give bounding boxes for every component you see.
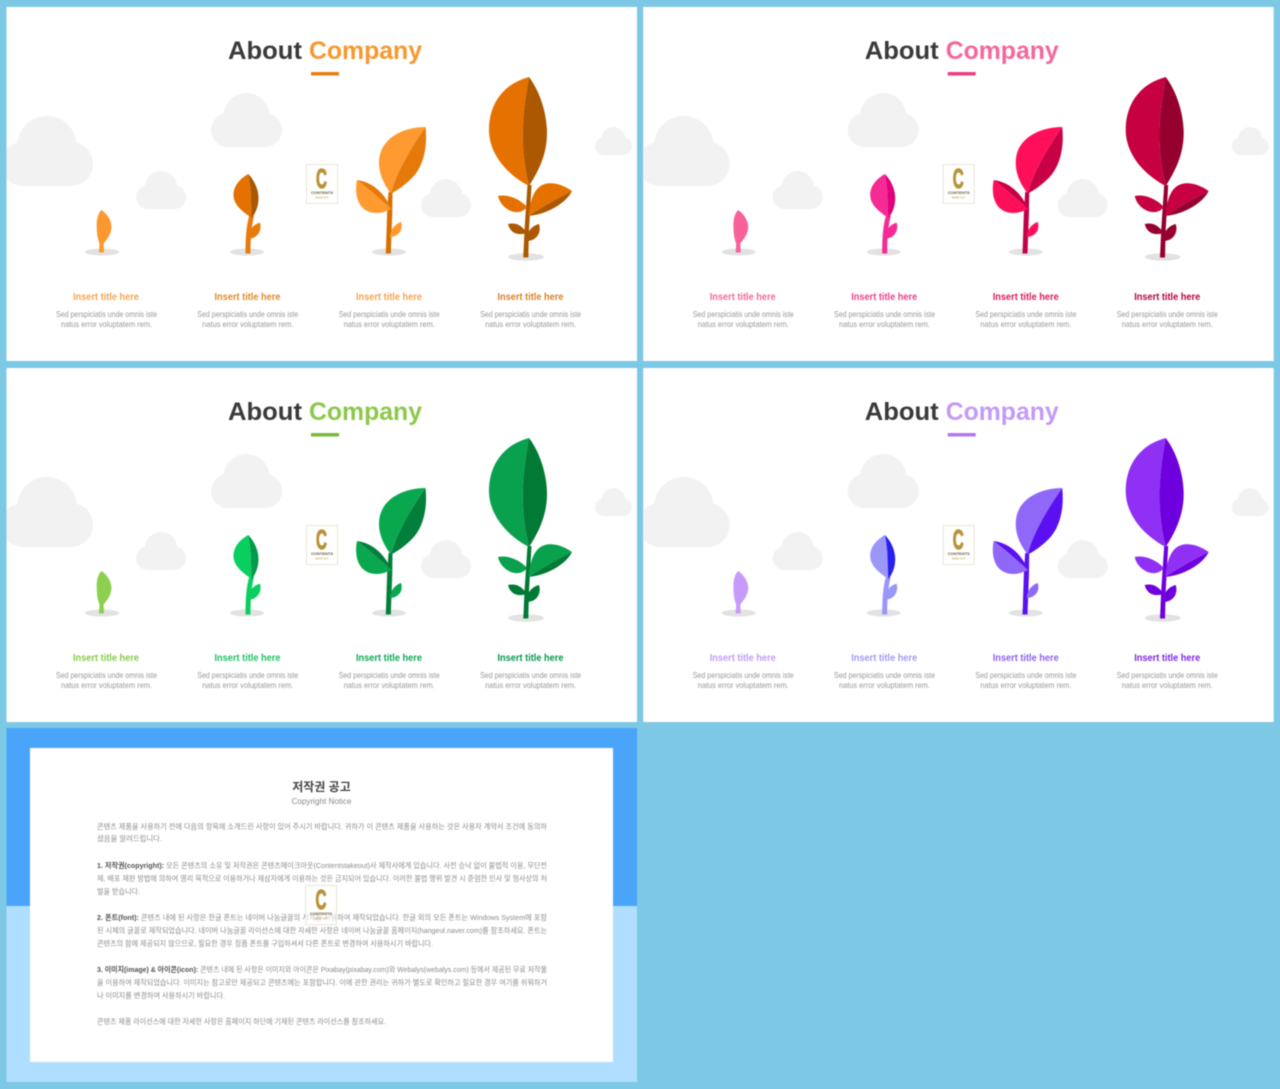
heading: About	[865, 37, 939, 65]
section 3 image and icon: 을 이용하여 제작되었습니다. 이미지는 참고로만 제공되고 콘텐츠에는 포함합니다. 이에 관한 권리는 귀하가 별도로 확인하고 필요한 경우 여기를 쉬워하거	[97, 977, 547, 987]
panel: purple About Company	[638, 368, 1274, 722]
caption 2	[834, 653, 935, 690]
plant stage 4	[1126, 77, 1209, 261]
logo watermark: C	[316, 524, 327, 555]
caption 3: Insert title here	[993, 653, 1059, 664]
caption 1: natus error voluptatem rem.	[698, 319, 789, 329]
heading	[228, 37, 422, 65]
logo watermark: CONTENTS	[310, 911, 332, 916]
section 1 copyright	[97, 860, 547, 896]
section 2 font: 콘텐츠의 함에 제공되지 않으므로, 필요한 경우 정품 폰트를 구입하셔서 다른 폰트로 변경하여 사용하시기 바랍니다.	[97, 938, 433, 948]
caption 2: Sed perspiciatis unde omnis iste	[197, 309, 299, 319]
caption 3	[975, 292, 1077, 329]
caption 4: Insert title here	[498, 653, 564, 664]
section 3 image and icon: 나 이미지를 변경하여 사용하시기 바랍니다.	[97, 990, 225, 1000]
heading	[865, 398, 1059, 426]
logo watermark: MAKE OUT	[315, 196, 329, 200]
caption 1: Sed perspiciatis unde omnis iste	[56, 670, 157, 680]
plant stage 3	[993, 488, 1063, 616]
heading: About	[228, 398, 303, 426]
caption 1: Insert title here	[710, 292, 776, 303]
caption 3: Sed perspiciatis unde omnis iste	[975, 670, 1077, 680]
caption 2: natus error voluptatem rem.	[202, 680, 293, 690]
caption 2: natus error voluptatem rem.	[839, 319, 930, 329]
caption 3: natus error voluptatem rem.	[980, 319, 1071, 329]
section 2 font: 2. 폰트(font): 콘텐츠 내에 된 사항은 한글 폰트는 네이버 나눔글꼴의 서체를 사용하여 제작되었습니다. 한글 외의 모든 폰트는 Windows System에 포함	[97, 912, 547, 922]
panel: green About Company	[1, 368, 637, 722]
caption 3: natus error voluptatem rem.	[980, 680, 1071, 690]
caption 3: Insert title here	[993, 292, 1059, 303]
caption 3: Sed perspiciatis unde omnis iste	[339, 670, 440, 680]
heading underline	[311, 72, 339, 76]
logo watermark	[306, 524, 338, 564]
section 1 copyright: 재, 배포 재판 방법에 의하여 영리 목적으로 이용하거나 제삼자에게 이용하는 것은 금지되어 있습니다. 이러한 불법 행위 발견 시 준엄한 민사 및 형사상의 처	[97, 873, 547, 883]
logo watermark: MAKE OUT	[952, 556, 966, 560]
heading: About	[865, 398, 939, 426]
caption 3: Sed perspiciatis unde omnis iste	[339, 309, 440, 319]
caption 2: Sed perspiciatis unde omnis iste	[834, 309, 935, 319]
intro paragraph: 셨음을 알려드립니다.	[97, 833, 162, 843]
heading underline	[948, 433, 976, 436]
caption 3: Insert title here	[356, 292, 422, 303]
intro paragraph	[97, 821, 547, 843]
closing line: 콘텐츠 제품 라이선스에 대한 자세한 사항은 홈페이지 하단에 기재된 콘텐츠 라이선스를 참조하세요.	[97, 1016, 386, 1026]
heading: Company	[946, 398, 1059, 426]
caption 2: Sed perspiciatis unde omnis iste	[834, 670, 935, 680]
caption 3: Sed perspiciatis unde omnis iste	[975, 309, 1077, 319]
logo watermark: C	[316, 884, 326, 915]
caption 2: Insert title here	[851, 653, 918, 664]
plant stage 4	[1126, 438, 1209, 622]
caption 4: Insert title here	[498, 292, 564, 303]
plant stage 4	[489, 77, 572, 261]
caption 1	[56, 653, 157, 690]
section 2 font: 된 시체의 글꼴로 제작되었습니다. 네이버 나눔글꼴 라이선스에 대한 자세한 사항은 네이버 나눔글꼴 홈페이지(hangeul.naver.com)를 참조하세요. 폰트는	[97, 925, 547, 935]
heading underline	[311, 433, 339, 436]
plant stage 2	[867, 535, 901, 616]
caption 3	[339, 653, 440, 690]
section 3 image and icon	[97, 964, 547, 1000]
caption 4: natus error voluptatem rem.	[485, 680, 576, 690]
caption 1: natus error voluptatem rem.	[61, 319, 152, 329]
panel: pink About Company	[638, 7, 1274, 361]
caption 1: natus error voluptatem rem.	[698, 680, 789, 690]
section 2 font	[97, 912, 547, 948]
caption 3	[975, 653, 1077, 690]
caption 1: Sed perspiciatis unde omnis iste	[693, 309, 794, 319]
logo watermark: C	[316, 163, 327, 194]
panel: copyright notice	[6, 728, 637, 1082]
plant stage 2	[867, 174, 901, 256]
heading	[865, 37, 1059, 65]
logo watermark: MAKE OUT	[314, 916, 328, 920]
notice title	[292, 779, 352, 806]
logo watermark	[943, 524, 974, 564]
caption 3	[339, 292, 440, 329]
caption 1: Sed perspiciatis unde omnis iste	[56, 309, 157, 319]
caption 4: natus error voluptatem rem.	[1122, 680, 1213, 690]
caption 4	[480, 292, 581, 329]
logo watermark: MAKE OUT	[952, 196, 966, 200]
caption 2	[834, 292, 935, 329]
heading: About	[228, 37, 303, 65]
section 3 image and icon: 3. 이미지(image) & 아이콘(icon): 콘텐츠 내에 된 사항은 이미지와 아이콘은 Pixabay(pixabay.com)와 Webalys(webalys.com) 등에서 제공된 무료 저작물	[97, 964, 547, 974]
plant stage 2	[230, 174, 264, 256]
caption 2: natus error voluptatem rem.	[202, 319, 293, 329]
caption 1: natus error voluptatem rem.	[61, 680, 152, 690]
heading: Company	[946, 37, 1059, 65]
caption 4	[1117, 292, 1218, 329]
heading underline	[948, 72, 976, 76]
logo watermark: CONTENTS	[311, 190, 333, 195]
logo watermark: CONTENTS	[311, 551, 333, 556]
intro paragraph: 콘텐츠 제품을 사용하기 전에 다음의 항목에 소개드린 사항이 있어 주시기 바랍니다. 귀하가 이 콘텐츠 제품을 사용하는 것은 사용자 계약서 조건에 동의하	[97, 821, 547, 831]
plant stage 3	[356, 488, 426, 616]
caption 4: Sed perspiciatis unde omnis iste	[1117, 309, 1218, 319]
plant stage 1	[85, 210, 119, 256]
heading	[228, 398, 422, 426]
caption 4: Insert title here	[1134, 653, 1201, 664]
section 1 copyright: 1. 저작권(copyright): 모든 콘텐츠의 소유 및 저작권은 콘텐츠메이크아웃(Contentstakeout)사 제작사에게 있습니다. 사전 승낙 없이 불법적 이용, 무단전	[97, 860, 547, 870]
logo watermark: MAKE OUT	[315, 556, 329, 560]
caption 4: Sed perspiciatis unde omnis iste	[480, 309, 581, 319]
plant stage 3	[993, 127, 1063, 256]
caption 3: Insert title here	[356, 653, 422, 664]
logo watermark	[943, 163, 974, 204]
caption 2	[197, 653, 299, 690]
caption 1: Insert title here	[73, 653, 139, 664]
caption 1	[693, 653, 794, 690]
logo watermark	[306, 163, 338, 204]
caption 4: natus error voluptatem rem.	[1122, 319, 1213, 329]
plant stage 1	[85, 571, 119, 616]
heading: Company	[309, 37, 422, 65]
caption 4: Insert title here	[1134, 292, 1201, 303]
caption 4	[1117, 653, 1218, 690]
notice title: 저작권 공고	[292, 779, 351, 794]
plant stage 2	[230, 535, 264, 616]
caption 2: Insert title here	[214, 292, 281, 303]
caption 4: natus error voluptatem rem.	[485, 319, 576, 329]
logo watermark: CONTENTS	[948, 190, 970, 195]
panel: orange About Company	[1, 7, 637, 361]
notice title: Copyright Notice	[292, 796, 352, 806]
caption 3: natus error voluptatem rem.	[344, 680, 435, 690]
plant stage 4	[489, 438, 572, 622]
plant stage 1	[722, 210, 756, 256]
plant stage 1	[722, 571, 756, 616]
caption 2: Insert title here	[214, 653, 281, 664]
logo watermark: C	[953, 163, 964, 194]
caption 1	[693, 292, 794, 329]
caption 2: Sed perspiciatis unde omnis iste	[197, 670, 299, 680]
caption 4: Sed perspiciatis unde omnis iste	[480, 670, 581, 680]
plant stage 3	[356, 127, 426, 256]
caption 2: Insert title here	[851, 292, 918, 303]
caption 2	[197, 292, 299, 329]
caption 1: Insert title here	[710, 653, 776, 664]
heading: Company	[309, 398, 422, 426]
caption 1: Insert title here	[73, 292, 139, 303]
caption 3: natus error voluptatem rem.	[344, 319, 435, 329]
logo watermark: CONTENTS	[948, 551, 970, 556]
section 1 copyright: 벌을 받습니다.	[97, 886, 140, 896]
caption 2: natus error voluptatem rem.	[839, 680, 930, 690]
caption 1	[56, 292, 157, 329]
logo watermark	[306, 884, 336, 924]
caption 1: Sed perspiciatis unde omnis iste	[693, 670, 794, 680]
caption 4: Sed perspiciatis unde omnis iste	[1117, 670, 1218, 680]
logo watermark: C	[953, 524, 964, 555]
caption 4	[480, 653, 581, 690]
